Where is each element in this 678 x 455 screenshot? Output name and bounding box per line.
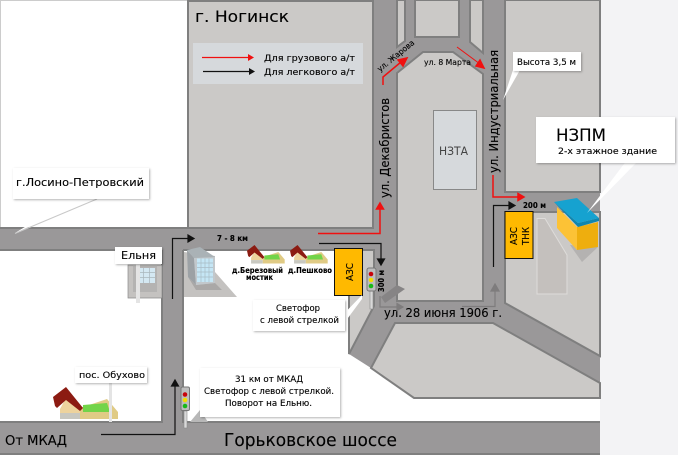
callout: г.Лосино-Петровский: г.Лосино-Петровский: [16, 176, 144, 189]
icon: traffic light near АЗС: [367, 268, 376, 309]
village labels: [232, 266, 332, 282]
callout: Светофор с левой стрелкой: Светофор: [276, 304, 320, 314]
callout: Светофор с левой стрелкой: с левой стрелкой: [260, 316, 339, 326]
distance labels: 200 м: [523, 201, 546, 210]
panel: city blocks: [349, 0, 600, 398]
callout: пос. Обухово: пос. Обухово: [79, 371, 146, 381]
callout: НЗПМ: НЗПМ: [556, 126, 606, 146]
car route: [101, 202, 515, 434]
street labels: ул. Жарова: [376, 38, 416, 74]
building: НЗПМ: [554, 198, 599, 262]
village labels: мостик: [246, 273, 273, 282]
distance labels: [217, 201, 546, 292]
callout: 31 км от МКАД: Светофор с левой стрелкой.: [204, 387, 334, 397]
gas station АЗС: [334, 248, 362, 296]
building: НЗТА: [434, 110, 476, 190]
village labels: д.Березовый: [232, 266, 283, 275]
truck route: [318, 47, 524, 234]
street labels: ул. Индустриальная: [486, 50, 501, 173]
turn markers: [380, 284, 499, 310]
callout: Высота 3,5 м: [503, 52, 581, 100]
distance labels: 300 м: [377, 270, 386, 292]
gas station АЗС: АЗС: [345, 263, 356, 281]
legend: [193, 43, 363, 84]
street labels: [5, 38, 502, 451]
callout: Высота 3,5 м: Высота 3,5 м: [517, 58, 576, 68]
callout: 31 км от МКАД: Поворот на Ельню.: [225, 399, 312, 409]
distance labels: 7 - 8 км: [217, 234, 248, 243]
panel: Noginsk city block: [188, 1, 373, 228]
legend: Для грузового а/т: [264, 54, 355, 64]
callout: НЗПМ: 2-х этажное здание: [558, 147, 657, 157]
callout: Светофор с левой стрелкой: [253, 295, 362, 331]
street labels: ул. 8 Марта: [424, 58, 471, 67]
gas station АЗС ТНК: АЗС: [509, 227, 520, 245]
gas station АЗС ТНК: ТНК: [521, 227, 532, 246]
callout: пос. Обухово: [75, 367, 147, 422]
street labels: ул. 28 июня 1906 г.: [384, 306, 502, 320]
building: Elnya left: [128, 265, 162, 298]
house: Обухово: [53, 387, 118, 419]
street labels: Горьковское шоссе: [224, 430, 397, 451]
house: д.Березовый мостик: [247, 245, 285, 264]
parking lot: [537, 218, 567, 294]
callout: Ельня: [115, 247, 162, 303]
gas station АЗС ТНК: [505, 212, 533, 258]
legend: Для легкового а/т: [264, 68, 355, 78]
callout: 31 км от МКАД: [190, 368, 340, 422]
callout: НЗПМ: [536, 117, 675, 213]
icon: traffic light on highway: [181, 387, 190, 428]
callout: Ельня: Ельня: [121, 249, 156, 262]
village labels: д.Пешково: [288, 266, 332, 275]
building: НЗТА: НЗТА: [439, 144, 468, 158]
house: д.Пешково: [290, 245, 328, 264]
street labels: От МКАД: [5, 434, 67, 449]
building: Elnya right: [184, 247, 237, 297]
callout: г.Лосино-Петровский: [13, 168, 149, 234]
heading: Noginsk: г. Ногинск: [195, 7, 289, 26]
callout: 31 км от МКАД: 31 км от МКАД: [235, 375, 303, 385]
street labels: ул. Декабристов: [377, 98, 392, 198]
